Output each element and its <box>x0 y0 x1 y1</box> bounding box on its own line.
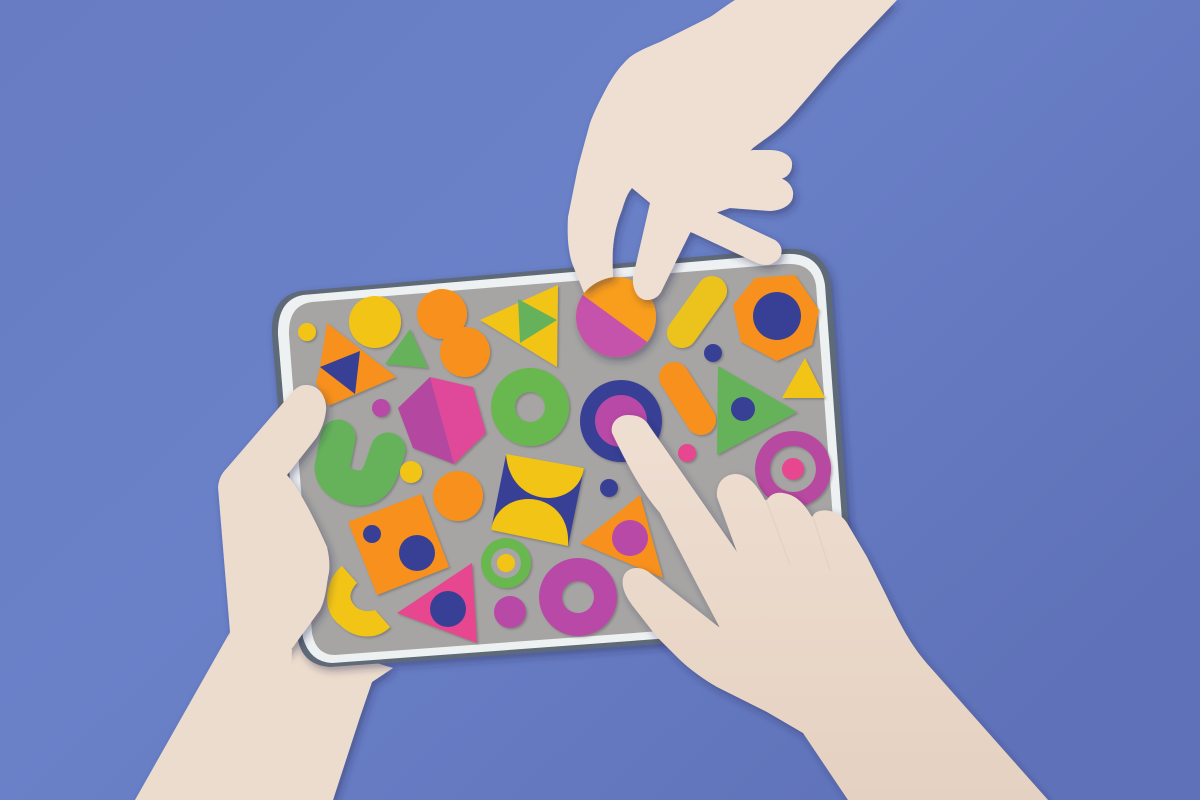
orange circle <box>433 471 483 521</box>
screen shapes <box>298 275 831 643</box>
finger: top <box>715 150 792 195</box>
blue and magenta ring <box>580 380 662 462</box>
yellow circles <box>298 296 401 348</box>
small green ring <box>481 538 531 588</box>
yellow pill <box>682 291 712 333</box>
orange double circle <box>417 289 490 377</box>
pink triangle with blue dot <box>397 563 477 643</box>
green U shape <box>332 437 388 488</box>
magenta target <box>755 431 831 507</box>
split coin held by top hand <box>575 276 663 365</box>
finger: lower <box>670 195 782 265</box>
orange square with dots <box>348 494 449 595</box>
magenta ring <box>539 558 617 636</box>
small blue dot 2 <box>600 479 618 497</box>
small pink dot <box>678 444 696 462</box>
top hand <box>568 0 897 300</box>
left wrist behind tablet <box>135 632 393 800</box>
orange triangle with magenta dot <box>580 495 663 578</box>
left hand <box>200 385 329 700</box>
green ring <box>491 368 569 446</box>
tablet <box>272 249 855 667</box>
small magenta circle <box>494 596 526 628</box>
right hand <box>612 415 1048 800</box>
green triangle with blue dot <box>717 366 797 455</box>
orange triangle with blue inset <box>316 323 396 406</box>
palm with thumb and index finger <box>568 0 897 300</box>
yellow triangle with green inset <box>480 285 558 367</box>
hexagon <box>398 377 486 464</box>
finger: middle <box>680 178 793 225</box>
magenta dot <box>372 399 390 417</box>
small yellow dot <box>400 461 422 483</box>
orange octagon with blue circle <box>733 275 819 361</box>
small blue dot <box>704 344 722 362</box>
green small triangle <box>385 329 428 368</box>
small yellow triangle <box>782 358 825 398</box>
hourglass tile <box>491 454 584 546</box>
yellow crescent <box>327 566 390 637</box>
orange pill <box>674 377 701 420</box>
